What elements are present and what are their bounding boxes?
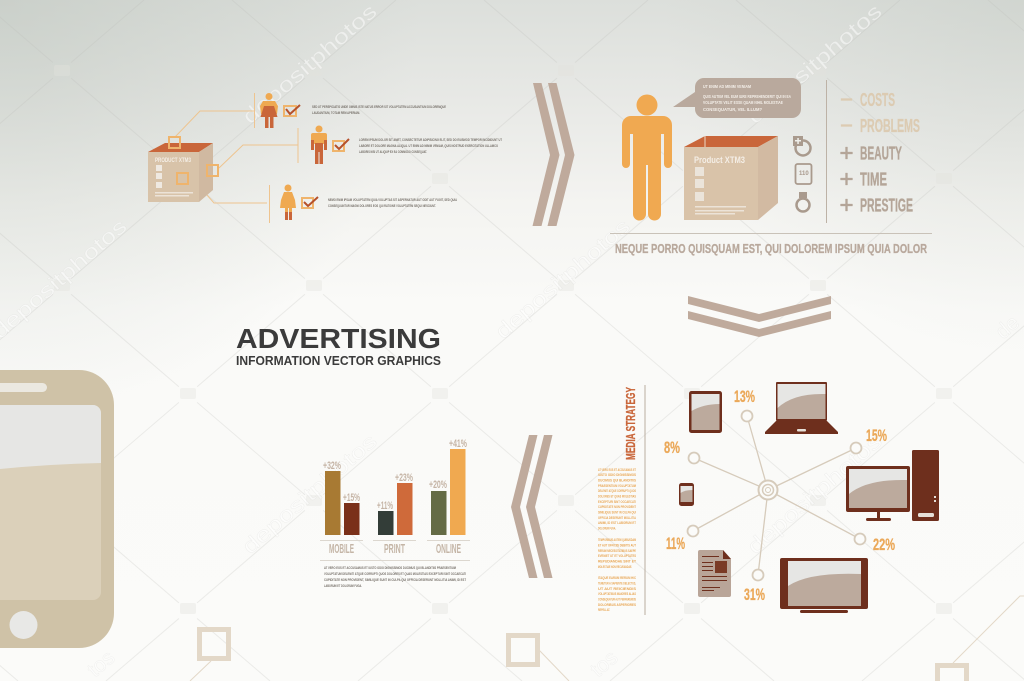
subtitle: INFORMATION VECTOR GRAPHICS — [236, 354, 441, 368]
percentage labels: 13% — [734, 387, 755, 406]
tagline: NEQUE PORRO QUISQUAM EST, QUI DOLOREM IPSUM QUIA DOLOR — [615, 242, 927, 256]
bar value labels: +41% — [449, 438, 467, 450]
icon: checkbox 1 — [284, 105, 300, 116]
text: person 1 description — [312, 104, 446, 115]
media text column: UT AUT REICIENDIS — [598, 586, 636, 591]
media text column: DUCIMUS QUI BLANDITIIS — [598, 478, 636, 482]
media text column: CUPIDITATE NON PROVIDENT — [598, 504, 636, 509]
speech bubble: QUIS AUTEM VEL EUM IURE REPREHENDERIT QUI IN EA — [703, 94, 792, 99]
title — [236, 323, 441, 368]
icon: tablet — [689, 391, 722, 433]
icons: benefit symbols — [793, 136, 812, 212]
icon: woman — [280, 184, 296, 220]
panel: media strategy — [598, 382, 939, 615]
text: tos — [83, 646, 119, 681]
bar value labels: +32% — [323, 460, 341, 472]
divider — [644, 385, 646, 615]
media text column: AT VERO EOS ET ACCUSAMUS ET — [598, 467, 636, 472]
text: person 1 description: LAUDANTIUM, TOTAM REM APERIAM. — [312, 110, 360, 115]
icon: phone — [679, 483, 694, 506]
connector lines — [175, 93, 298, 223]
media text column: REPELLAT. — [598, 607, 610, 612]
text: depositphotos — [743, 0, 887, 129]
list: costs and benefits: TIME — [860, 170, 887, 190]
panel: customer and product benefits — [610, 78, 932, 256]
bar value labels: +23% — [395, 472, 413, 484]
percentage labels: 15% — [866, 426, 887, 445]
media text column: ANIMI, ID EST LABORUM ET — [598, 520, 636, 525]
chart caption: AT VERO EOS ET ACCUSAMUS ET IUSTO ODIO DIGNISSIMOS DUCIMUS QUI BLANDITIIS PRAESENTIUM — [324, 565, 456, 570]
media text column: ITAQUE EARUM RERUM HIC — [598, 575, 636, 580]
percentage labels: 11% — [666, 534, 685, 553]
category labels: PRINT — [384, 541, 405, 556]
speech bubble: VOLUPTATE VELIT ESSE QUAM NIHIL MOLESTIAE — [703, 100, 783, 105]
text: person 1 description: SED UT PERSPICIATIS UNDE OMNIS ISTE NATUS ERROR SIT VOLUPTATEM ACCUSANTIUM DOLOREMQUE — [312, 104, 446, 109]
product box: PRODUCT XTM3 — [155, 157, 191, 164]
media text column: TEMPORIBUS AUTEM QUIBUSDAM — [598, 537, 636, 542]
arrow: right chevrons — [532, 83, 574, 226]
media strategy heading: MEDIA STRATEGY — [623, 387, 638, 460]
speech bubble — [673, 78, 801, 118]
chart caption — [324, 565, 466, 588]
icon: checkbox 3 — [302, 197, 318, 208]
panel: bar chart — [320, 438, 470, 588]
title: ADVERTISING — [236, 323, 441, 354]
chart caption: LABORUM ET DOLORUM FUGA. — [324, 583, 362, 588]
arrow: left chevrons — [511, 435, 552, 578]
media text column: REPUDIANDAE SINT ET — [598, 558, 636, 564]
radial network chart — [688, 410, 866, 580]
media text column: OFFICIA DESERUNT MOLLITIA — [598, 515, 636, 520]
text: depositphotos — [743, 430, 887, 559]
media text column: DOLORIBUS ASPERIORES — [598, 602, 636, 607]
text: tos — [586, 646, 622, 681]
percentage labels: 22% — [873, 535, 895, 554]
bars — [325, 449, 466, 535]
media text column: VOLUPTATIBUS MAIORES ALIAS — [598, 591, 636, 596]
percentage labels — [664, 387, 895, 604]
category labels: MOBILE — [329, 541, 354, 556]
icon: laptop — [765, 382, 838, 434]
chart caption: VOLUPTATUM DELENITI ATQUE CORRUPTI QUOS DOLORES ET QUAS MOLESTIAS EXCEPTURI SINT OCCAECATI — [324, 571, 466, 576]
arrow: down chevrons — [688, 296, 831, 337]
panel: product target audience — [148, 93, 502, 223]
text: de — [991, 311, 1024, 344]
media text column: ET AUT OFFICIIS DEBITIS AUT — [598, 542, 636, 548]
media text column: EXCEPTURI SINT OCCAECATI — [598, 499, 636, 504]
media text column: DELENITI ATQUE CORRUPTI QUOS — [598, 488, 636, 493]
text: person 2 description: LOREM IPSUM DOLOR SIT AMET, CONSECTETUR ADIPISICING ELIT, SED DO EIUSMOD TEMPOR INCIDIDUNT UT — [359, 137, 502, 142]
icon: television — [780, 558, 868, 613]
text: person 2 description: LABORIS NISI UT ALIQUIP EX EA COMMODO CONSEQUAT. — [359, 149, 427, 154]
bar value labels: +20% — [429, 479, 447, 491]
text: person 3 description: NEMO ENIM IPSAM VOLUPTATEM QUIA VOLUPTAS SIT ASPERNATUR AUT ODIT AUT FUGIT, SED QUIA — [328, 197, 457, 202]
media text column: MOLESTIAE NON RECUSANDAE. — [598, 564, 632, 569]
divider — [826, 80, 828, 223]
icon: desktop computer — [846, 450, 939, 521]
axis rules — [320, 540, 470, 560]
speech bubble: CONSEQUATUR, VEL ILLUM? — [703, 107, 762, 112]
media text column: PRAESENTIUM VOLUPTATUM — [598, 483, 636, 488]
text: depositphotos — [491, 215, 635, 344]
text: depositphotos — [238, 430, 382, 559]
media text column: EVENIET UT ET VOLUPTATES — [598, 553, 636, 558]
list: costs and benefits: PRESTIGE — [860, 196, 913, 216]
category labels — [329, 541, 461, 556]
list: costs and benefits: COSTS — [860, 90, 895, 110]
speech bubble: UT ENIM AD MINIM VENIAM — [703, 84, 751, 89]
list: costs and benefits — [840, 90, 920, 216]
icons: benefit symbols: 110 — [799, 171, 809, 177]
media text column: CONSEQUATUR AUT PERFERENDIS — [598, 596, 636, 602]
list: costs and benefits: BEAUTY — [860, 144, 902, 164]
media text column: DOLORES ET QUAS MOLESTIAS — [598, 494, 636, 498]
divider — [610, 232, 932, 234]
text: depositphotos — [238, 0, 382, 129]
icon: document — [698, 550, 731, 597]
product box — [148, 143, 213, 202]
product box large: Product XTM3 — [694, 155, 745, 165]
decorative squares — [190, 596, 1024, 681]
list: costs and benefits: PROBLEMS — [860, 116, 920, 136]
icon: man — [311, 126, 327, 164]
media text column: RERUM NECESSITATIBUS SAEPE — [598, 548, 636, 553]
percentage labels: 31% — [744, 585, 765, 604]
product box large — [684, 136, 778, 220]
icon: large person — [622, 94, 672, 220]
text: person 3 description: CONSEQUUNTUR MAGNI DOLORES EOS QUI RATIONE VOLUPTATEM SEQUI NESCIUNT. — [328, 203, 436, 208]
media text column: TENETUR A SAPIENTE DELECTUS, — [598, 580, 636, 586]
category labels: ONLINE — [436, 541, 461, 556]
media text column: DOLORUM FUGA. — [598, 526, 616, 530]
bar value labels: +11% — [377, 500, 393, 512]
text: person 2 description: LABORE ET DOLORE MAGNA ALIQUA. UT ENIM AD MINIM VENIAM, QUIS NOSTRUD EXERCITATION ULLAMCO — [359, 143, 498, 148]
percentage labels: 8% — [664, 438, 680, 457]
text: person 3 description — [328, 197, 457, 208]
connector nodes — [169, 137, 218, 184]
icon: woman with child — [260, 93, 278, 128]
media text column: SIMILIQUE SUNT IN CULPA QUI — [598, 510, 636, 514]
chart caption: CUPIDITATE NON PROVIDENT, SIMILIQUE SUNT IN CULPA QUI OFFICIA DESERUNT MOLLITIA ANIMI, ID EST — [324, 577, 466, 582]
bar value labels: +15% — [343, 492, 360, 504]
media text column: IUSTO ODIO DIGNISSIMOS — [598, 472, 636, 477]
media text column — [598, 467, 636, 612]
icon: checkbox 2 — [333, 139, 349, 151]
icon: large phone — [0, 370, 114, 648]
bar value labels — [323, 438, 467, 512]
text: person 2 description — [359, 137, 502, 154]
